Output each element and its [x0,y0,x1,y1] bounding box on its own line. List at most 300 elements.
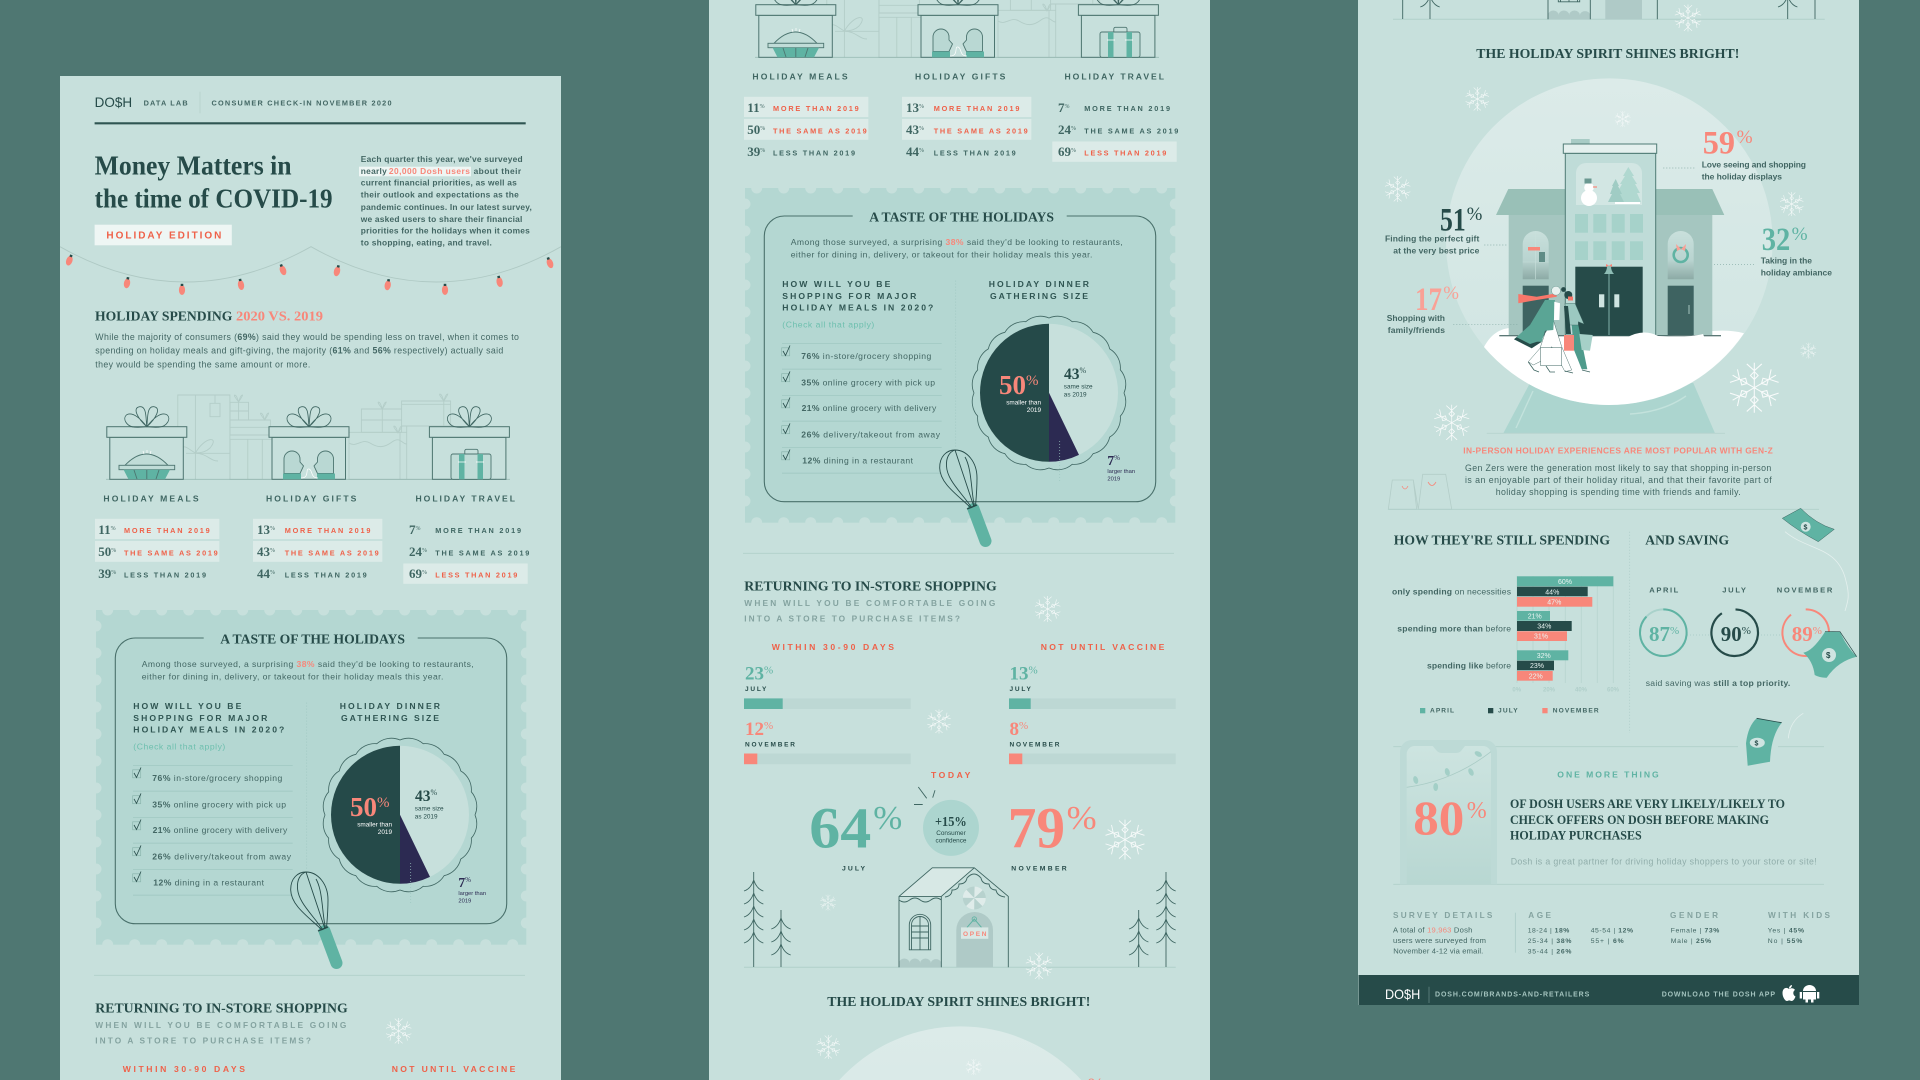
callout: 51% perfect gift [1385,203,1508,256]
text block: gen z: IN-PERSON HOLIDAY EXPERIENCES ARE MOST POPULAR WITH GEN-Z [1463,446,1773,456]
spending comparison table: % [270,548,275,554]
consumer confidence comparison: +15% [935,814,967,829]
intro paragraph: to shopping, eating, and travel. [361,238,492,248]
bar group: not until vaccine: JULY [1010,686,1031,693]
pie chart: dinner gathering size: 50 [350,792,377,822]
bar group: within 30-90 days: 12 [745,719,764,740]
spending comparison table: MORE THAN 2019 [1084,104,1170,113]
spending comparison table: 39 [747,144,760,159]
consumer confidence comparison: 79 [1008,796,1065,860]
stat: 59% [1054,1073,1104,1080]
panel: a taste of the holidays [745,188,1175,541]
checklist: meal shopping: 21% online grocery with delivery [153,825,288,835]
intro paragraph: 20,000 Dosh users [389,166,470,176]
icon: money bill lower: $ [1826,651,1831,660]
column labels: NOT UNTIL VACCINE [1041,642,1165,652]
intro paragraph: their outlook and expectations as the [361,190,519,200]
checklist: meal shopping: 26% delivery/takeout from away [801,429,941,439]
spending comparison table [95,519,529,584]
phone illustration with stat: 80 [1413,790,1464,845]
bar chart: spending behaviour: 32% [1537,653,1551,660]
column labels: WITHIN 30-90 DAYS [772,642,894,652]
illustration: snow globe and shoppers [1446,78,1773,433]
pie chart: dinner gathering size: GATHERING SIZE [990,291,1088,301]
spending comparison table: 43 [906,122,919,137]
callout: 32% holiday ambiance: 32 [1762,222,1790,258]
callout: 59% holiday displays: 59 [1703,125,1735,161]
pie chart: dinner gathering size: % [430,788,438,797]
bar group: within 30-90 days: 23 [745,664,764,684]
heading: taste of the holidays: A TASTE OF THE HOLIDAYS [220,632,405,647]
bar group: within 30-90 days: JULY [745,686,767,693]
heading: returning to in-store shopping: INTO A STORE TO PURCHASE ITEMS? [744,614,960,624]
pie chart: dinner gathering size: 7 [458,875,465,890]
icon: shopping bags outline [1388,474,1819,509]
callout: 51% perfect gift: Finding the perfect gift [1385,234,1479,244]
checklist: meal shopping: HOLIDAY MEALS IN 2020? [133,724,284,734]
survey details: SURVEY DETAILS [1393,911,1493,920]
bar chart: spending behaviour: 34% [1537,624,1551,631]
consumer confidence comparison: NOVEMBER [1011,866,1067,873]
saving rings: NOVEMBER [1777,586,1833,595]
illustration: gingerbread store and trees: OPEN [963,931,987,938]
holiday spending paragraph: While the majority of consumers (69%) said they would be spending less on travel, when it comes to [95,332,519,342]
spending comparison table: 39 [98,566,111,581]
saving rings: APRIL [1649,586,1679,595]
category labels: HOLIDAY GIFTS [266,493,357,503]
illustration: three gift boxes [755,0,1159,57]
illustration: gingerbread store and trees [1393,0,1825,19]
spending comparison table [744,97,1178,162]
pie chart: dinner gathering size: 7 [1107,453,1114,468]
heading: returning to in-store shopping: WHEN WILL YOU BE COMFORTABLE GOING [744,598,995,608]
bar chart: spending behaviour: 44% [1545,589,1559,596]
icon: snowflake [820,895,836,911]
callout: 32% holiday ambiance: holiday ambiance [1761,268,1832,278]
pie chart: dinner gathering size: 2019 [1107,476,1120,482]
survey details: No | 55% [1768,938,1802,945]
icon: snowflake [816,1035,840,1059]
saving rings: 89 [1792,622,1813,646]
pie chart: dinner gathering size: 2019 [1027,407,1041,414]
category labels: HOLIDAY TRAVEL [1064,71,1164,81]
spending comparison table: % [760,126,765,132]
badge: holiday edition [95,225,232,245]
text block: one more thing: HOLIDAY PURCHASES [1510,829,1642,843]
consumer confidence comparison: Consumer [936,830,967,837]
header: Dosh logo and data lab: DATA LAB [144,99,188,108]
pie chart: dinner gathering size: 2019 [378,829,392,836]
spending comparison table: MORE THAN 2019 [773,104,859,113]
string lights [60,247,561,295]
callout: 32% holiday ambiance: Taking in the [1761,256,1812,266]
spending comparison table: 11 [98,522,111,537]
spending comparison table: THE SAME AS 2019 [435,548,529,557]
spending comparison table: 44 [257,566,270,581]
callout: 59% holiday displays: the holiday displays [1702,172,1782,182]
footer bar: DO$H [1385,986,1420,1002]
bar group: within 30-90 days: % [764,664,773,676]
callout: 32% holiday ambiance [1714,222,1832,278]
checklist: meal shopping [782,279,942,473]
callout: 17% shopping with family: Shopping with [1387,313,1445,323]
spending comparison table: LESS THAN 2019 [435,570,517,579]
survey details: 35-44 | 26% [1528,948,1571,955]
spending comparison table: LESS THAN 2019 [285,570,367,579]
phone illustration with stat [1400,740,1497,884]
heading: holiday spending: HOLIDAY SPENDING [95,310,233,325]
spending comparison table: % [1064,104,1070,110]
spending comparison table: % [919,104,924,110]
saving rings: % [1813,625,1822,637]
survey details: AGE [1528,911,1552,920]
heading: holiday spending [95,310,323,325]
bar chart: spending behaviour: spending more than before [1397,623,1511,633]
survey details: users were surveyed from [1393,936,1486,945]
spending comparison table: % [919,148,924,154]
spending comparison table: THE SAME AS 2019 [773,126,867,135]
icon: snowflake [385,1018,412,1044]
icon: whisk [291,872,336,963]
title: Money Matters in [95,149,292,180]
illustration: gingerbread store and trees [744,868,1176,967]
survey details: GENDER [1670,911,1718,920]
saving rings [1640,586,1833,688]
heading: taste of the holidays: A TASTE OF THE HOLIDAYS [869,210,1054,225]
pie chart: dinner gathering size [323,701,486,904]
spending comparison table: THE SAME AS 2019 [124,548,218,557]
icon: snowflake [1034,596,1061,622]
taste intro text: either for dining in, delivery, or takeout for their holiday meals this year. [142,672,443,682]
text block: gen z [1463,446,1773,497]
survey details [1393,911,1831,955]
checklist: meal shopping: HOW WILL YOU BE [782,279,891,289]
bar group: not until vaccine: 13 [1010,664,1028,684]
spending comparison table: 50 [747,122,760,137]
spending comparison table: 44 [906,144,919,159]
bar chart: spending behaviour: 47% [1547,600,1561,607]
consumer confidence comparison: % [873,800,902,837]
text block: gen z: holiday shopping is spending time with friends and family. [1496,487,1741,497]
consumer confidence comparison [809,770,1097,873]
spending comparison table: % [270,526,275,532]
pie chart: dinner gathering size: larger than [458,891,486,897]
survey details: 45-54 | 12% [1591,928,1633,935]
spending comparison table: LESS THAN 2019 [773,148,855,157]
consumer confidence comparison: confidence [936,837,967,844]
intro paragraph: nearly [361,166,387,176]
spending comparison table: 69 [409,566,422,581]
checklist: meal shopping [133,701,293,895]
taste intro text: Among those surveyed, a surprising 38% said they'd be looking to restaurants, [791,237,1123,247]
spending comparison table: % [422,570,427,576]
heading: returning to in-store shopping [744,579,997,624]
callout: 51% perfect gift: at the very best price [1393,246,1480,256]
callout: 51% perfect gift: 51 [1440,203,1466,239]
spending comparison table: 43 [257,544,270,559]
spending comparison table: THE SAME AS 2019 [934,126,1028,135]
text block: gen z: Gen Zers were the generation most likely to say that shopping in-person [1465,463,1771,473]
callout: 59% holiday displays: Love seeing and shopping [1702,160,1806,170]
spending comparison table: MORE THAN 2019 [934,104,1019,113]
checklist: meal shopping: (Check all that apply) [133,742,225,752]
holiday spending paragraph [95,332,519,370]
spending comparison table: 24 [409,544,422,559]
survey details: WITH KIDS [1768,911,1831,920]
taste intro text: Among those surveyed, a surprising 38% said they'd be looking to restaurants, [142,659,474,669]
pie chart: dinner gathering size: 50 [999,370,1026,400]
intro paragraph: pandemic continues. In our latest survey, [361,202,532,212]
intro paragraph: we asked users to share their financial [360,214,522,224]
spending comparison table: MORE THAN 2019 [435,526,521,535]
category labels: HOLIDAY MEALS [103,493,199,503]
taste intro text: either for dining in, delivery, or takeout for their holiday meals this year. [791,250,1092,260]
checklist: meal shopping: (Check all that apply) [782,320,874,330]
checklist: meal shopping: 35% online grocery with pick up [152,799,286,809]
pie chart: dinner gathering size: % [377,795,390,811]
survey details: 18-24 | 18% [1528,928,1569,935]
taste intro text [791,237,1123,260]
bar chart: spending behaviour: 60% [1558,579,1572,586]
text block: one more thing: Dosh is a great partner for driving holiday shoppers to your store or site! [1511,857,1817,867]
icon: money bill middle [1746,713,1803,766]
spending comparison table: 13 [257,522,270,537]
spending comparison table: % [416,526,420,532]
column labels [772,642,1165,652]
pie chart: dinner gathering size: % [1080,366,1086,375]
saving rings: JULY [1722,586,1746,595]
holiday spending paragraph: spending on holiday meals and gift-giving, the majority (61% and 56% respectively) actually said [95,346,503,356]
bar chart: spending behaviour: 0% [1512,688,1522,694]
pie chart: dinner gathering size: same size [1064,384,1093,391]
category labels [752,71,1164,81]
spending comparison table: 13 [906,100,919,115]
spending comparison table: 50 [98,544,111,559]
bar group: not until vaccine: % [1028,664,1038,676]
callout: 59% holiday displays [1663,125,1806,182]
spending comparison table: % [111,570,116,576]
intro paragraph [359,154,532,248]
category labels [103,493,515,503]
checklist: meal shopping: 76% in-store/grocery shopping [152,773,283,783]
illustration: snow globe [797,1026,1124,1080]
text block: one more thing: OF DOSH USERS ARE VERY LIKELY/LIKELY TO [1510,797,1785,811]
spending comparison table: % [422,548,427,554]
checklist: meal shopping: 76% in-store/grocery shopping [801,351,932,361]
category labels: HOLIDAY GIFTS [915,71,1006,81]
heading: returning to in-store shopping: WHEN WILL YOU BE COMFORTABLE GOING [95,1020,346,1030]
holiday spending paragraph: they would be spending the same amount or more. [95,360,310,370]
title [95,149,333,213]
heading: holiday spending: 2020 VS. 2019 [236,310,323,325]
header: Dosh logo and data lab: DO$H [95,94,132,110]
heading: and saving: AND SAVING [1645,534,1729,549]
icon: android [1800,985,1819,1002]
checklist: meal shopping: HOLIDAY MEALS IN 2020? [782,302,933,312]
callout: 32% holiday ambiance: % [1792,224,1808,245]
footer bar [1358,975,1859,1005]
bar chart: spending behaviour: only spending on necessities [1392,587,1511,597]
spending comparison table: % [1071,126,1076,132]
spending comparison table: % [760,104,765,110]
intro paragraph: Each quarter this year, we've surveyed [361,154,523,164]
spending comparison table: 24 [1058,122,1071,137]
pie chart: dinner gathering size: 43 [1064,366,1080,383]
heading: holiday spirit: THE HOLIDAY SPIRIT SHINES BRIGHT! [827,995,1090,1010]
spending comparison table: % [111,548,116,554]
bar group: within 30-90 days [744,664,911,764]
snowflakes around the globe [1384,87,1816,441]
icon: snowflake [927,710,951,734]
icon: money bill top [1782,508,1848,611]
icon: snowflake [1674,4,1702,32]
checklist: meal shopping: HOW WILL YOU BE [133,701,242,711]
heading: returning to in-store shopping: RETURNING TO IN-STORE SHOPPING [744,579,997,594]
footer bar: DOSH.COM/BRANDS-AND-RETAILERS [1435,992,1590,999]
survey details: 55+ | 6% [1591,938,1624,945]
bar group: not until vaccine [1009,664,1176,764]
spending comparison table: LESS THAN 2019 [934,148,1016,157]
bar chart: spending behaviour: 20% [1543,688,1556,694]
pie chart: dinner gathering size: % [465,876,471,884]
spending comparison table: % [111,526,116,532]
title: the time of COVID-19 [95,182,333,213]
intro paragraph: current financial priorities, as well as [361,178,517,188]
spending comparison table: LESS THAN 2019 [1084,148,1166,157]
bar group: within 30-90 days: % [764,720,773,732]
icon: whisk [940,450,986,541]
spending comparison table: THE SAME AS 2019 [1084,126,1178,135]
illustration: three gift boxes [106,394,510,479]
category labels: HOLIDAY MEALS [752,71,848,81]
icon: snowflake [1105,820,1145,860]
spending comparison table: % [1071,148,1076,154]
pie chart: dinner gathering size: HOLIDAY DINNER [989,279,1090,289]
pie chart: dinner gathering size: 43 [415,788,430,805]
pie chart: dinner gathering size: 2019 [458,898,471,904]
header: Dosh logo and data lab [95,92,526,123]
intro paragraph: about their [474,166,522,176]
heading: returning to in-store shopping: RETURNING TO IN-STORE SHOPPING [95,1001,348,1016]
pie chart: dinner gathering size: smaller than [1006,400,1041,407]
text block: gen z: is an enjoyable part of their holiday ritual, and that their favorite part of [1465,475,1772,485]
column labels: NOT UNTIL VACCINE [392,1064,516,1074]
heading: returning to in-store shopping: INTO A STORE TO PURCHASE ITEMS? [95,1036,311,1046]
pie chart: dinner gathering size: larger than [1107,469,1135,475]
survey details: Yes | 45% [1768,928,1804,935]
spending comparison table: MORE THAN 2019 [124,526,210,535]
panel: infographic part one [60,76,561,1080]
bar group: not until vaccine: NOVEMBER [1010,742,1060,749]
legend: JULY [1498,708,1518,715]
saving rings: % [1742,625,1751,637]
spending comparison table: THE SAME AS 2019 [285,548,379,557]
pie chart: dinner gathering size [972,279,1135,482]
heading: returning to in-store shopping [95,1001,348,1046]
callout: 17% shopping with family: family/friends [1388,325,1445,335]
saving rings: 90 [1721,622,1742,646]
spending comparison table: LESS THAN 2019 [124,570,206,579]
bar chart: spending behaviour: 21% [1528,614,1542,621]
icon: snowflake [966,1059,982,1075]
pie chart: dinner gathering size: GATHERING SIZE [341,713,439,723]
bar chart: spending behaviour: 31% [1534,634,1548,641]
callout: 17% shopping with family: % [1443,283,1459,304]
bar chart: spending behaviour [1392,576,1620,694]
consumer confidence comparison: TODAY [931,770,971,780]
spending comparison table: 69 [1058,144,1071,159]
pie chart: dinner gathering size: HOLIDAY DINNER [340,701,441,711]
consumer confidence comparison: JULY [842,866,865,873]
checklist: meal shopping: 26% delivery/takeout from away [152,851,292,861]
pie chart: dinner gathering size: smaller than [357,822,392,829]
spending comparison table: 11 [747,100,760,115]
pie chart: dinner gathering size: % [1026,373,1038,389]
badge: holiday edition: HOLIDAY EDITION [106,231,221,242]
panel: infographic part three [1358,0,1859,1005]
pie chart: dinner gathering size: as 2019 [1064,392,1087,399]
saving rings: % [1670,625,1679,637]
saving rings: 87 [1649,622,1670,646]
icon: money bill lower [1803,631,1857,678]
bar chart: spending behaviour: 60% [1607,688,1620,694]
bar chart: spending behaviour: 40% [1575,688,1588,694]
survey details: Female | 73% [1671,928,1719,935]
legend: NOVEMBER [1553,708,1599,715]
callout: 17% shopping with family: 17 [1415,282,1442,318]
checklist: meal shopping: 12% dining in a restaurant [153,878,265,888]
consumer confidence comparison: % [1067,800,1097,837]
legend: APRIL [1430,708,1454,715]
bar chart: spending behaviour: spending like before [1427,660,1511,670]
bar chart: spending behaviour: 23% [1530,663,1544,670]
checklist: meal shopping: SHOPPING FOR MAJOR [782,291,917,301]
checklist: meal shopping: 35% online grocery with pick up [801,377,935,387]
legend [1420,708,1599,715]
text block: one more thing: CHECK OFFERS ON DOSH BEFORE MAKING [1510,813,1769,827]
bar group: not until vaccine: 8 [1010,719,1019,740]
pie chart: dinner gathering size: as 2019 [415,814,438,821]
pie chart: dinner gathering size: % [1114,454,1120,462]
survey details: Male | 25% [1671,938,1711,945]
icon: snowflake [1025,952,1053,980]
survey details: 25-34 | 38% [1528,938,1571,945]
pie chart: dinner gathering size: same size [415,806,444,813]
panel: a taste of the holidays [96,610,526,963]
phone illustration with stat: % [1467,798,1487,824]
spending comparison table: 7 [1058,100,1064,115]
heading: how they're still spending: HOW THEY'RE STILL SPENDING [1394,534,1610,549]
callout: 17% shopping with family [1387,282,1518,335]
text block: one more thing [1510,770,1817,867]
consumer confidence comparison: 64 [809,796,871,860]
survey details: November 4-12 via email. [1393,946,1483,955]
checklist: meal shopping: 21% online grocery with delivery [802,403,937,413]
survey details: A total of 19,963 Dosh [1393,926,1472,935]
spending comparison table: 7 [409,522,416,537]
header: Dosh logo and data lab: CONSUMER CHECK-IN NOVEMBER 2020 [212,99,392,108]
footer bar: DOWNLOAD THE DOSH APP [1662,992,1775,999]
category labels: HOLIDAY TRAVEL [416,493,515,503]
heading: holiday spirit: THE HOLIDAY SPIRIT SHINES BRIGHT! [1476,47,1739,62]
column labels [123,1064,516,1074]
bar group: not until vaccine: % [1019,720,1028,732]
spending comparison table: % [919,126,924,132]
column labels: WITHIN 30-90 DAYS [123,1064,245,1074]
spending comparison table: MORE THAN 2019 [285,526,370,535]
bar group: within 30-90 days: NOVEMBER [745,742,795,749]
checklist: meal shopping: 12% dining in a restaurant [802,456,914,466]
